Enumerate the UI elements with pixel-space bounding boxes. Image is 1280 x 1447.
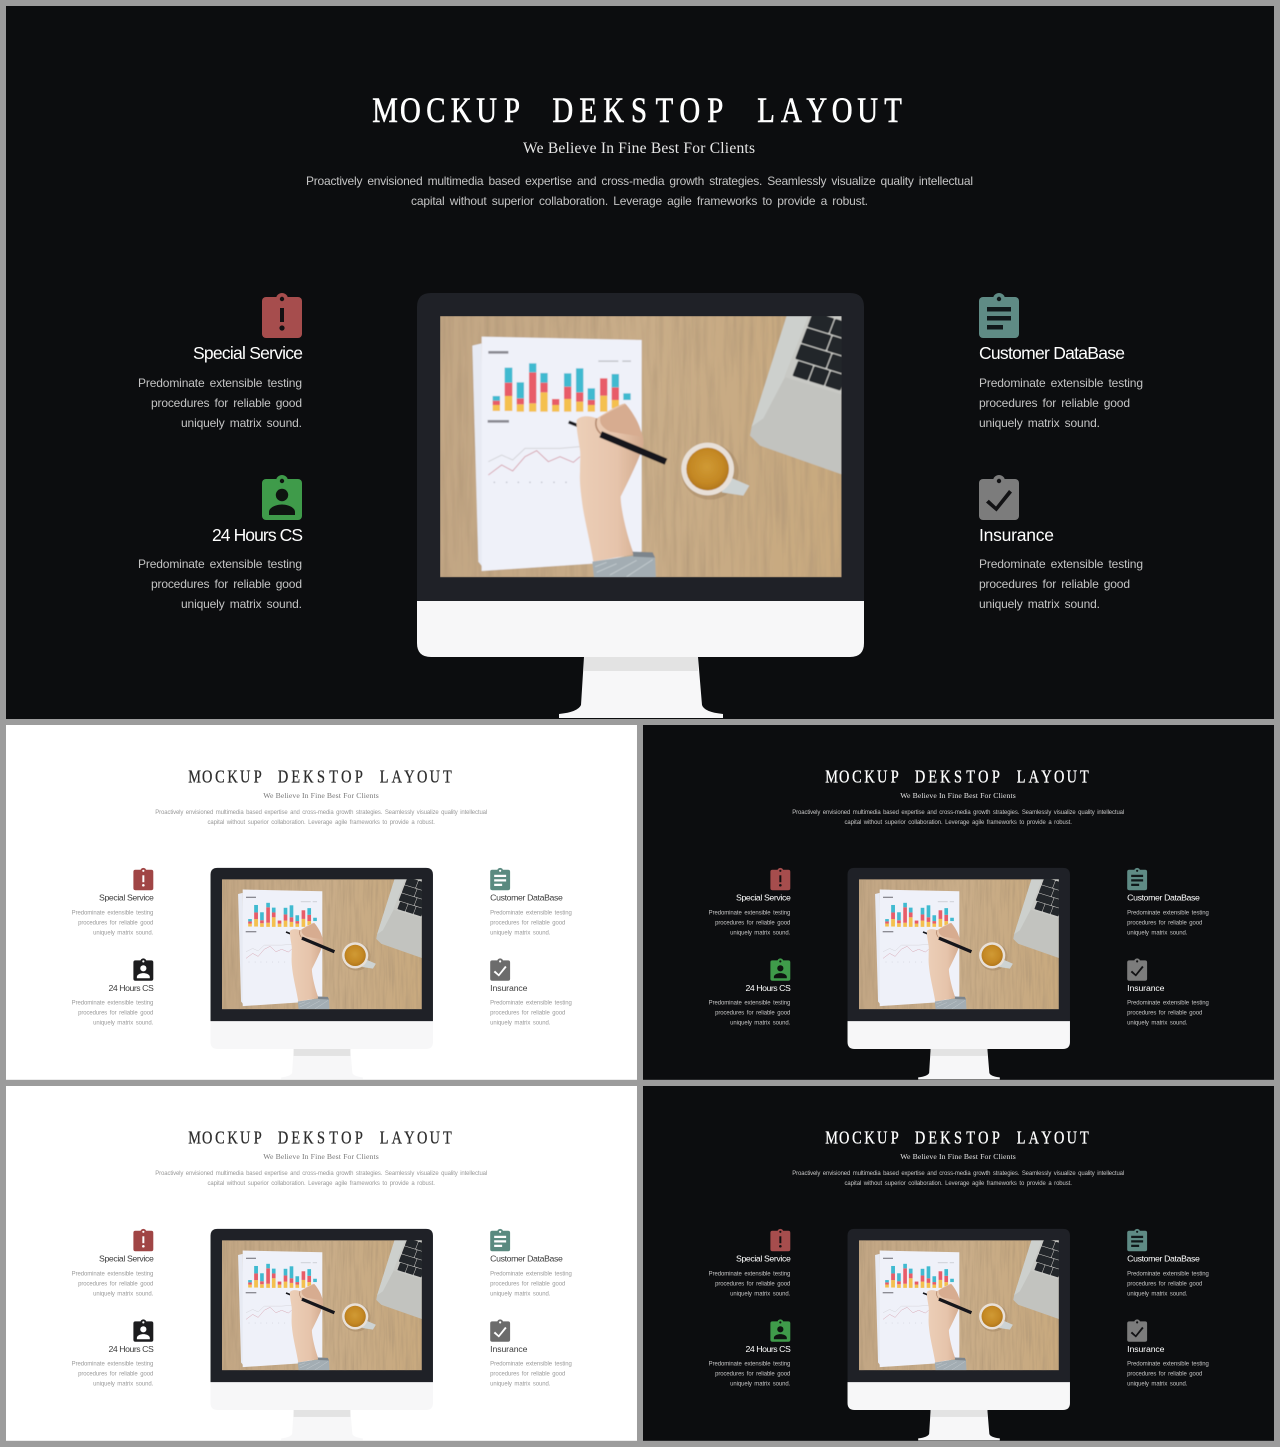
item: Special Service: procedures for reliable good xyxy=(715,921,790,927)
item: Insurance xyxy=(490,958,572,1027)
item: Customer DataBase xyxy=(1127,868,1209,937)
item: Special Service: Predominate extensible testing xyxy=(72,911,153,917)
subtitle: We Believe In Fine Best For Clients xyxy=(900,791,1016,800)
item: Special Service: uniquely matrix sound. xyxy=(93,931,154,937)
item: 24 Hours CS: procedures for reliable good xyxy=(151,577,302,591)
intro text: Proactively envisioned multimedia based expertise and cross-media growth strategies. Seamlessly visualize quality intellectual xyxy=(155,810,487,816)
item: Insurance: Predominate extensible testing xyxy=(490,1362,572,1368)
item: 24 Hours CS: uniquely matrix sound. xyxy=(93,1382,154,1388)
item: Customer DataBase: uniquely matrix sound. xyxy=(490,1292,551,1298)
title: MOCKUP DEKSTOP LAYOUT xyxy=(825,767,1089,787)
item: Insurance: procedures for reliable good xyxy=(1127,1011,1202,1017)
monitor xyxy=(848,868,1078,1079)
item: Customer DataBase: Customer DataBase xyxy=(490,1254,563,1264)
item: 24 Hours CS: 24 Hours CS xyxy=(109,1344,154,1354)
panel: large dark slide xyxy=(6,6,1274,719)
item: Special Service: uniquely matrix sound. xyxy=(730,931,791,937)
item: Insurance xyxy=(490,1319,572,1388)
item: Customer DataBase: uniquely matrix sound. xyxy=(1127,1292,1188,1298)
item: Special Service xyxy=(72,868,154,937)
item: 24 Hours CS: 24 Hours CS xyxy=(109,983,154,993)
item: Special Service: Special Service xyxy=(736,893,791,903)
item: Special Service: uniquely matrix sound. xyxy=(93,1292,154,1298)
item: Customer DataBase: procedures for reliable good xyxy=(979,396,1130,410)
subtitle: We Believe In Fine Best For Clients xyxy=(523,140,755,157)
item: Special Service: Special Service xyxy=(99,1254,154,1264)
panel: small dark slide, row 1 xyxy=(643,725,1274,1080)
item: Insurance xyxy=(979,475,1143,611)
item: Customer DataBase: procedures for reliable good xyxy=(1127,921,1202,927)
item: Insurance: Insurance xyxy=(1127,1344,1165,1354)
item: 24 Hours CS: procedures for reliable good xyxy=(78,1011,153,1017)
item: 24 Hours CS: Predominate extensible testing xyxy=(72,1001,153,1007)
item: Special Service: Special Service xyxy=(99,893,154,903)
item: 24 Hours CS xyxy=(138,475,303,611)
item: 24 Hours CS: 24 Hours CS xyxy=(212,525,303,545)
item: 24 Hours CS xyxy=(709,958,791,1027)
item: Customer DataBase: procedures for reliable good xyxy=(490,1282,565,1288)
item: Customer DataBase: uniquely matrix sound. xyxy=(979,416,1100,430)
item: Customer DataBase: Customer DataBase xyxy=(490,893,563,903)
item: Customer DataBase xyxy=(979,293,1143,430)
subtitle: We Believe In Fine Best For Clients xyxy=(263,1152,379,1161)
item: 24 Hours CS: 24 Hours CS xyxy=(746,983,791,993)
item: Insurance: Insurance xyxy=(1127,983,1165,993)
title: MOCKUP DEKSTOP LAYOUT xyxy=(188,767,452,787)
item: 24 Hours CS: Predominate extensible testing xyxy=(72,1362,153,1368)
item: Customer DataBase: Customer DataBase xyxy=(1127,1254,1200,1264)
intro text: Proactively envisioned multimedia based expertise and cross-media growth strategies. Seamlessly visualize quality intellectual xyxy=(306,174,973,188)
intro text xyxy=(792,810,1124,826)
item: Insurance: uniquely matrix sound. xyxy=(490,1021,551,1027)
monitor xyxy=(848,1229,1078,1440)
item: Special Service xyxy=(709,868,791,937)
item: 24 Hours CS: uniquely matrix sound. xyxy=(730,1021,791,1027)
item: Customer DataBase: Customer DataBase xyxy=(1127,893,1200,903)
item: Special Service: procedures for reliable good xyxy=(78,921,153,927)
item: 24 Hours CS: procedures for reliable good xyxy=(715,1372,790,1378)
item: 24 Hours CS: Predominate extensible testing xyxy=(138,557,302,571)
item: 24 Hours CS xyxy=(72,958,154,1027)
item: Special Service: procedures for reliable good xyxy=(78,1282,153,1288)
item: Special Service xyxy=(138,293,303,430)
item: Insurance: uniquely matrix sound. xyxy=(490,1382,551,1388)
title: MOCKUP DEKSTOP LAYOUT xyxy=(825,1128,1089,1148)
intro text: capital without superior collaboration. Leverage agile frameworks to provide a robust. xyxy=(411,194,868,208)
intro text: capital without superior collaboration. Leverage agile frameworks to provide a robust. xyxy=(208,820,435,826)
intro text xyxy=(155,1171,487,1187)
item: Special Service: Special Service xyxy=(193,343,303,363)
item: Insurance: procedures for reliable good xyxy=(979,577,1130,591)
item: Insurance xyxy=(1127,958,1209,1027)
monitor xyxy=(211,1229,441,1440)
title: MOCKUP DEKSTOP LAYOUT xyxy=(372,91,902,131)
item: Customer DataBase: procedures for reliable good xyxy=(1127,1282,1202,1288)
item: Special Service xyxy=(709,1229,791,1298)
item: 24 Hours CS: procedures for reliable good xyxy=(715,1011,790,1017)
item: 24 Hours CS: uniquely matrix sound. xyxy=(730,1382,791,1388)
item: Customer DataBase: uniquely matrix sound. xyxy=(490,931,551,937)
item: Special Service: Predominate extensible testing xyxy=(709,1272,790,1278)
intro text: capital without superior collaboration. Leverage agile frameworks to provide a robust. xyxy=(208,1181,435,1187)
item: Customer DataBase xyxy=(1127,1229,1209,1298)
item: Customer DataBase: Predominate extensible testing xyxy=(1127,911,1209,917)
item: Special Service: procedures for reliable good xyxy=(151,396,302,410)
intro text: Proactively envisioned multimedia based expertise and cross-media growth strategies. Seamlessly visualize quality intellectual xyxy=(155,1171,487,1177)
item: Insurance: Predominate extensible testing xyxy=(1127,1001,1209,1007)
intro text xyxy=(155,810,487,826)
item: Insurance: uniquely matrix sound. xyxy=(979,597,1100,611)
item: Insurance: procedures for reliable good xyxy=(1127,1372,1202,1378)
item: 24 Hours CS: uniquely matrix sound. xyxy=(181,597,302,611)
intro text: Proactively envisioned multimedia based expertise and cross-media growth strategies. Seamlessly visualize quality intellectual xyxy=(792,810,1124,816)
item: Insurance: Predominate extensible testing xyxy=(1127,1362,1209,1368)
item: Insurance: Predominate extensible testing xyxy=(979,557,1143,571)
item: Customer DataBase: Predominate extensible testing xyxy=(490,1272,572,1278)
item: 24 Hours CS: 24 Hours CS xyxy=(746,1344,791,1354)
item: Special Service: Special Service xyxy=(736,1254,791,1264)
item: Special Service: Predominate extensible testing xyxy=(72,1272,153,1278)
item: Insurance: Predominate extensible testing xyxy=(490,1001,572,1007)
item: Insurance: Insurance xyxy=(490,1344,528,1354)
item: Insurance: uniquely matrix sound. xyxy=(1127,1382,1188,1388)
item: Customer DataBase: Predominate extensible testing xyxy=(979,376,1143,390)
subtitle: We Believe In Fine Best For Clients xyxy=(263,791,379,800)
intro text xyxy=(306,174,973,208)
item: Special Service: procedures for reliable good xyxy=(715,1282,790,1288)
item: Insurance: procedures for reliable good xyxy=(490,1372,565,1378)
item: Customer DataBase: Predominate extensible testing xyxy=(490,911,572,917)
item: Special Service: uniquely matrix sound. xyxy=(181,416,302,430)
intro text: capital without superior collaboration. Leverage agile frameworks to provide a robust. xyxy=(845,820,1072,826)
item: 24 Hours CS: procedures for reliable good xyxy=(78,1372,153,1378)
panel: small light slide, row 1 xyxy=(6,725,637,1080)
item: Customer DataBase: Customer DataBase xyxy=(979,343,1125,363)
item: Customer DataBase: Predominate extensible testing xyxy=(1127,1272,1209,1278)
monitor xyxy=(417,293,881,718)
intro text xyxy=(792,1171,1124,1187)
item: 24 Hours CS: uniquely matrix sound. xyxy=(93,1021,154,1027)
panel: small light slide, row 2 xyxy=(6,1086,637,1441)
item: Special Service: uniquely matrix sound. xyxy=(730,1292,791,1298)
item: Insurance: Insurance xyxy=(490,983,528,993)
intro text: Proactively envisioned multimedia based expertise and cross-media growth strategies. Seamlessly visualize quality intellectual xyxy=(792,1171,1124,1177)
item: 24 Hours CS xyxy=(72,1319,154,1388)
item: 24 Hours CS xyxy=(709,1319,791,1388)
intro text: capital without superior collaboration. Leverage agile frameworks to provide a robust. xyxy=(845,1181,1072,1187)
item: 24 Hours CS: Predominate extensible testing xyxy=(709,1362,790,1368)
item: Special Service: Predominate extensible testing xyxy=(709,911,790,917)
item: Customer DataBase: procedures for reliable good xyxy=(490,921,565,927)
item: Special Service xyxy=(72,1229,154,1298)
item: Insurance: uniquely matrix sound. xyxy=(1127,1021,1188,1027)
item: Insurance: Insurance xyxy=(979,525,1054,545)
monitor xyxy=(211,868,441,1079)
panel: small dark slide, row 2 xyxy=(643,1086,1274,1441)
item: Customer DataBase xyxy=(490,1229,572,1298)
item: Insurance xyxy=(1127,1319,1209,1388)
item: Customer DataBase: uniquely matrix sound. xyxy=(1127,931,1188,937)
item: Customer DataBase xyxy=(490,868,572,937)
subtitle: We Believe In Fine Best For Clients xyxy=(900,1152,1016,1161)
item: Insurance: procedures for reliable good xyxy=(490,1011,565,1017)
item: Special Service: Predominate extensible testing xyxy=(138,376,302,390)
item: 24 Hours CS: Predominate extensible testing xyxy=(709,1001,790,1007)
title: MOCKUP DEKSTOP LAYOUT xyxy=(188,1128,452,1148)
